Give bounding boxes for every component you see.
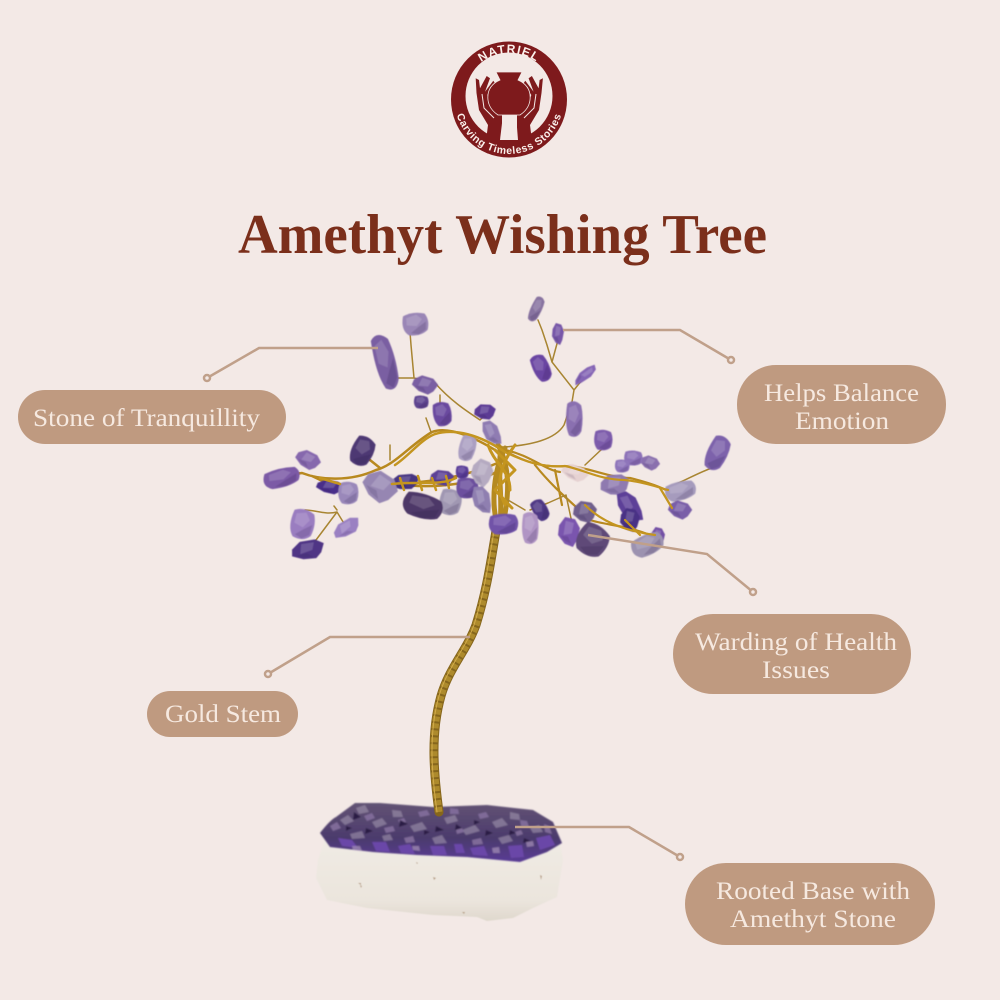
label: Stone of Tranquillity: Stone of Tranquillity <box>33 405 261 432</box>
logo left hand <box>476 76 502 141</box>
callout line: Warding of Health Issues <box>588 535 756 595</box>
logo name: NATRIEL <box>478 44 536 62</box>
logo tagline: Carving Timeless Stories <box>458 114 561 154</box>
callout line: Stone of Tranquillity <box>204 348 378 381</box>
callout line: Gold Stem <box>265 637 470 677</box>
logo pedestal <box>500 115 518 140</box>
label: Helps Balance Emotion: Helps Balance <box>764 380 919 407</box>
title: Amethyt Wishing Tree <box>238 204 767 266</box>
label: Gold Stem <box>147 691 298 737</box>
tree: amethyst stones <box>261 295 734 564</box>
logo: Natriel emblem <box>451 42 567 158</box>
label: Warding of Health Issues <box>673 614 911 694</box>
label: Gold Stem: Gold Stem <box>165 701 282 728</box>
label: Helps Balance Emotion <box>737 365 946 444</box>
label: Rooted Base with Amethyt Stone: Amethyt Stone <box>730 906 896 933</box>
tree: amethyst crust <box>320 803 562 862</box>
label: Rooted Base with Amethyt Stone: Rooted Base with <box>716 878 911 905</box>
label: Warding of Health Issues: Issues <box>762 657 830 684</box>
callout line: Helps Balance Emotion <box>563 330 734 363</box>
label: Rooted Base with Amethyt Stone <box>685 863 935 945</box>
tree: wire branches <box>281 320 712 548</box>
tree: gold wires over stones <box>320 432 672 535</box>
logo vase <box>488 72 530 115</box>
tree: gold trunk <box>432 445 508 812</box>
callout line: Rooted Base <box>515 827 683 860</box>
tree: base rock <box>316 838 563 921</box>
logo right hand <box>517 76 543 141</box>
label: Stone of Tranquillity <box>18 390 286 444</box>
label: Helps Balance Emotion: Emotion <box>795 408 890 435</box>
label: Warding of Health Issues: Warding of Health <box>695 629 898 656</box>
logo hand lines <box>482 94 536 118</box>
